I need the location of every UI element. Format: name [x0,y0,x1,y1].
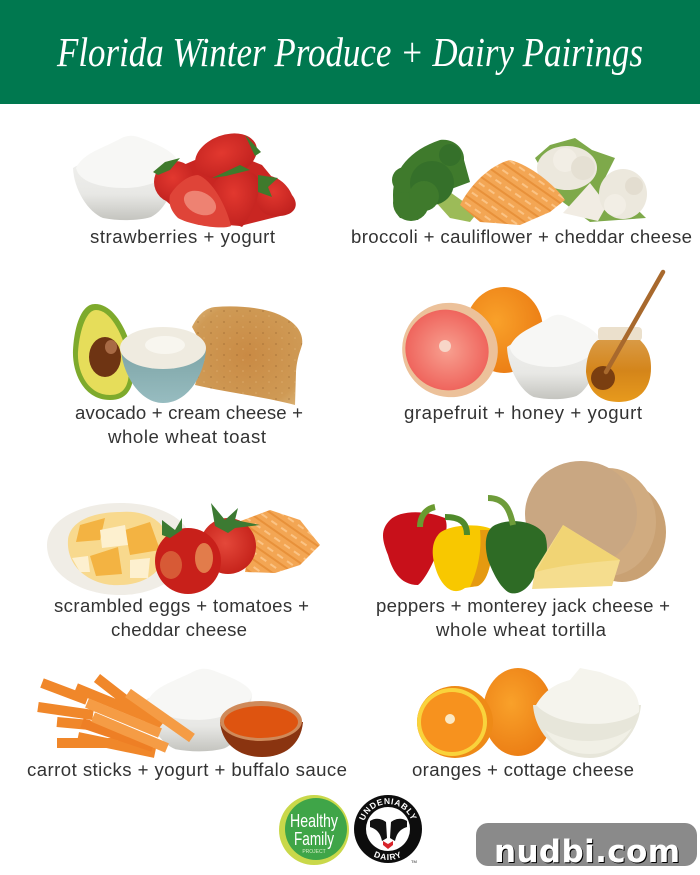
label: grapefruit + honey + yogurt [404,402,643,423]
label: avocado + cream cheese + [75,402,303,423]
curved text: DAIRY: DAIRY [374,851,400,860]
label: broccoli + cauliflower + cheddar cheese [351,226,692,247]
icon: cauliflower [535,138,647,222]
icon: tortillas [525,461,666,582]
icon: red pepper [383,507,447,585]
title banner [0,0,700,104]
cow face [370,819,407,849]
logo text: Healthy: Healthy [290,811,338,831]
icon: yogurt bowl [145,669,252,751]
logo text: Family: Family [294,829,334,849]
watermark [476,823,697,871]
icon: cream cheese bowl [120,327,206,403]
panel: carrots + yogurt + buffalo sauce [27,669,347,780]
panel: avocado + cream cheese + toast [73,304,303,447]
label line 2: whole wheat tortilla [435,619,607,640]
icon: whole wheat toast [192,306,302,405]
icon: buffalo sauce bowl [220,701,303,757]
label: oranges + cottage cheese [412,759,634,780]
icon: plate of eggs [47,503,192,595]
panel: strawberries + yogurt [73,125,296,247]
label: peppers + monterey jack cheese + [376,595,670,616]
icon: shredded cheddar [238,510,320,573]
icon: whole tomato [200,503,260,574]
panel: grapefruit + honey + yogurt [387,272,663,423]
icon: avocado [73,304,134,400]
icon: cottage cheese bowl [533,668,641,758]
logo: Healthy Family Project [279,795,349,865]
icon: yellow pepper [433,517,493,591]
watermark text: nudbi.com [494,834,680,870]
icon: strawberries [153,125,296,227]
logo: Undeniably Dairy [354,795,422,864]
icon: monterey jack wedge [532,525,620,589]
label: strawberries + yogurt [90,226,276,247]
icon: orange half [417,686,493,758]
label line 2: cheddar cheese [111,619,247,640]
label: carrot sticks + yogurt + buffalo sauce [27,759,347,780]
panel: peppers + monterey jack + tortilla [376,461,670,640]
icon: broccoli [392,140,478,222]
watermark text shadow: nudbi.com [495,835,681,871]
panel: broccoli + cauliflower + cheddar [351,138,692,247]
label line 2: whole wheat toast [107,426,267,447]
icon: yogurt bowl [73,136,178,220]
panel: eggs + tomatoes + cheddar [47,503,320,640]
logo text: Project: PROJECT [302,849,326,855]
icon: whole orange [483,668,553,756]
icon: shredded cheddar [460,160,565,225]
trademark: TM [411,859,417,864]
icon: honey jar with dipper [586,272,663,402]
icon: green pepper [486,498,547,593]
curved text: UNDENIABLY: UNDENIABLY [359,798,417,820]
label: scrambled eggs + tomatoes + [54,595,309,616]
icon: grapefruit half [387,287,513,413]
icon: yogurt bowl [507,315,600,399]
icon: carrot sticks [38,678,192,753]
icon: whole grapefruit [465,287,543,373]
icon: tomato half [155,518,221,594]
panel: oranges + cottage cheese [412,668,641,780]
